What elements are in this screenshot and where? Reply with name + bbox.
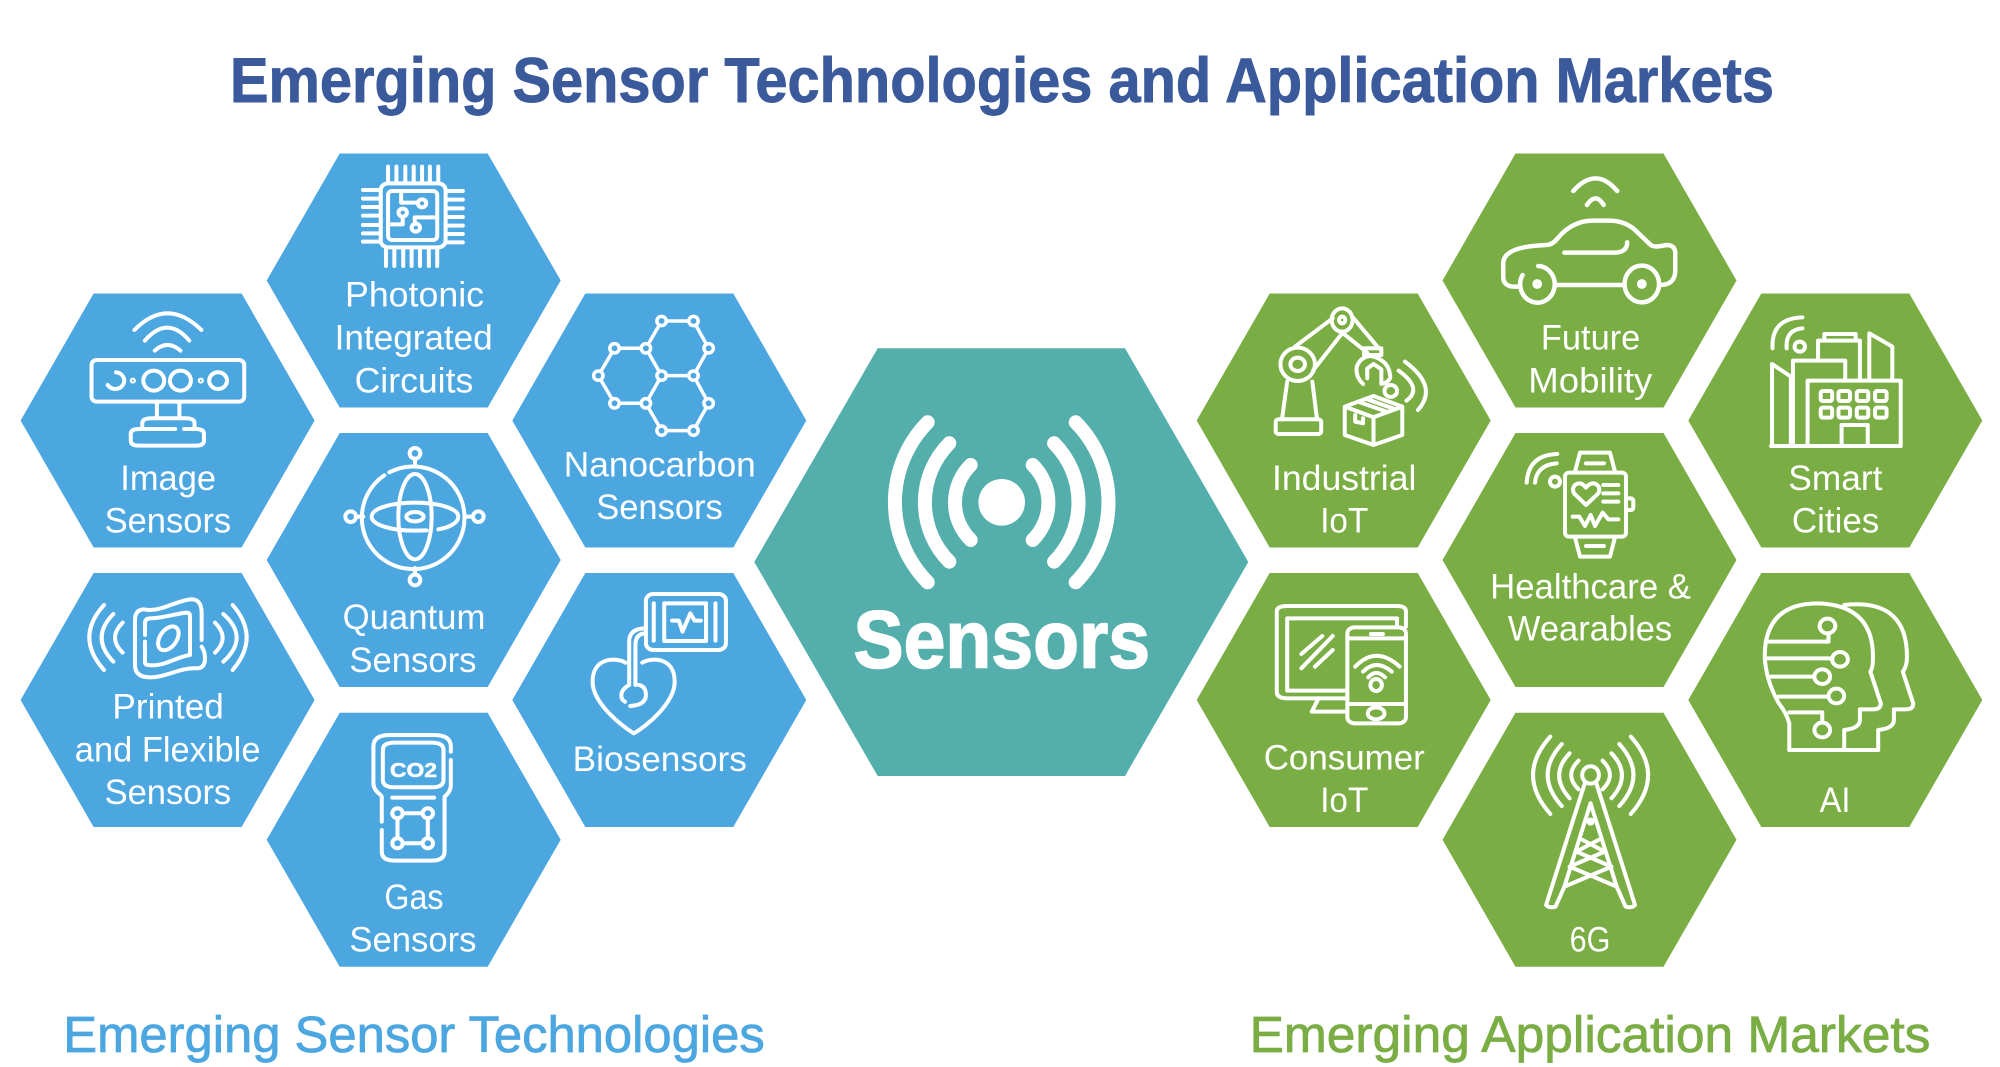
label: Healthcare & Wearables: Healthcare & bbox=[1490, 567, 1691, 606]
panel: industrial iot bbox=[1197, 294, 1491, 548]
hexagon: consumer iot bbox=[1197, 573, 1491, 827]
label: Smart Cities: Smart bbox=[1788, 459, 1883, 498]
panel: healthcare and wearables bbox=[1442, 433, 1736, 687]
panel: image sensors bbox=[21, 294, 315, 548]
title: Emerging Sensor Technologies and Application Markets bbox=[230, 46, 1774, 116]
label: Consumer IoT: IoT bbox=[1320, 781, 1368, 820]
label: Smart Cities bbox=[1788, 459, 1883, 540]
label: Photonic Integrated Circuits bbox=[335, 276, 493, 400]
label: Printed and Flexible Sensors: and Flexible bbox=[75, 730, 260, 769]
label: Quantum Sensors bbox=[343, 598, 485, 680]
panel: future mobility bbox=[1442, 154, 1736, 408]
hexagon: gas sensors bbox=[267, 713, 561, 967]
label: Industrial IoT: Industrial bbox=[1272, 459, 1416, 498]
icon: depth camera with wifi bbox=[92, 313, 244, 446]
hexagon: biosensors bbox=[512, 573, 806, 827]
label: Photonic Integrated Circuits: Circuits bbox=[355, 361, 473, 400]
hexagon: nanocarbon sensors bbox=[512, 294, 806, 548]
panel: central sensors hexagon bbox=[754, 348, 1248, 776]
label: Printed and Flexible Sensors bbox=[75, 687, 260, 812]
icon: connected car bbox=[1503, 178, 1675, 303]
hexagon: future mobility bbox=[1442, 154, 1736, 408]
hexagon: printed and flexible sensors bbox=[21, 573, 315, 827]
label: Future Mobility: Future bbox=[1541, 318, 1640, 357]
icon: smartwatch bbox=[1527, 453, 1633, 557]
label: Consumer IoT bbox=[1264, 738, 1425, 820]
label: Sensors: Sensors bbox=[854, 595, 1150, 686]
label: Future Mobility bbox=[1528, 318, 1653, 400]
icon: carbon lattice bbox=[594, 316, 713, 435]
icon: monitor and phone with wifi bbox=[1277, 606, 1406, 723]
icon: robot arm and box bbox=[1276, 308, 1426, 445]
label: Industrial IoT bbox=[1272, 459, 1416, 540]
label: Biosensors: Biosensors bbox=[573, 740, 747, 779]
panel: 6G bbox=[1442, 713, 1736, 967]
panel: printed and flexible sensors bbox=[21, 573, 315, 827]
label: Healthcare & Wearables: Wearables bbox=[1508, 610, 1672, 649]
label: Consumer IoT: Consumer bbox=[1264, 738, 1425, 777]
label: Smart Cities: Cities bbox=[1792, 501, 1879, 540]
hexagon: sensors hub bbox=[754, 348, 1248, 776]
hexagon: smart cities bbox=[1688, 294, 1982, 548]
label: Gas Sensors bbox=[349, 878, 476, 960]
label: Gas Sensors: Sensors bbox=[349, 921, 476, 960]
label: Image Sensors: Sensors bbox=[105, 501, 231, 540]
label: AI: AI bbox=[1820, 781, 1850, 820]
panel: smart cities bbox=[1688, 294, 1982, 548]
hexagon: quantum sensors bbox=[267, 433, 561, 687]
icon: CO2 gas meter: CO2 bbox=[390, 760, 437, 782]
icon: chip bbox=[363, 167, 463, 266]
label: 6G: 6G bbox=[1570, 921, 1610, 960]
hexagon: 6G bbox=[1442, 713, 1736, 967]
panel: biosensors bbox=[512, 573, 806, 827]
heading: emerging application markets: Emerging Application Markets bbox=[1250, 1006, 1930, 1063]
label: Nanocarbon Sensors: Sensors bbox=[596, 488, 723, 527]
label: Healthcare & Wearables bbox=[1490, 567, 1691, 649]
panel: photonic integrated circuits bbox=[267, 154, 561, 408]
panel: quantum sensors bbox=[267, 433, 561, 687]
label: Quantum Sensors: Quantum bbox=[343, 598, 485, 637]
icon: CO2 gas meter bbox=[373, 735, 451, 861]
hexagon: image sensors bbox=[21, 294, 315, 548]
icon: flexible sensor sheet bbox=[89, 599, 247, 677]
panel: consumer iot bbox=[1197, 573, 1491, 827]
hexagon: industrial iot bbox=[1197, 294, 1491, 548]
icon: broadcast signal bbox=[895, 422, 1108, 582]
label: Image Sensors bbox=[105, 459, 231, 540]
label: Printed and Flexible Sensors: Sensors bbox=[105, 773, 231, 812]
icon: quantum orbit sphere bbox=[345, 448, 484, 585]
hexagon: AI bbox=[1688, 573, 1982, 827]
panel: nanocarbon sensors bbox=[512, 294, 806, 548]
label: Industrial IoT: IoT bbox=[1320, 501, 1368, 540]
panel: gas sensors bbox=[267, 713, 561, 967]
label: Nanocarbon Sensors bbox=[564, 446, 756, 527]
label: Quantum Sensors: Sensors bbox=[349, 641, 476, 680]
label: Gas Sensors: Gas bbox=[384, 878, 444, 917]
label: Printed and Flexible Sensors: Printed bbox=[112, 687, 224, 726]
icon: cell tower bbox=[1533, 737, 1648, 907]
icon: AI heads with circuits bbox=[1765, 603, 1913, 750]
label: Future Mobility: Mobility bbox=[1528, 361, 1653, 400]
panel: AI bbox=[1688, 573, 1982, 827]
label: Image Sensors: Image bbox=[120, 459, 216, 498]
hexagon: photonic integrated circuits bbox=[267, 154, 561, 408]
label: Photonic Integrated Circuits: Photonic bbox=[345, 276, 484, 315]
icon: connected buildings bbox=[1771, 317, 1901, 446]
label: Nanocarbon Sensors: Nanocarbon bbox=[564, 446, 756, 485]
icon: heart with monitor bbox=[593, 594, 726, 733]
label: Photonic Integrated Circuits: Integrated bbox=[335, 318, 493, 357]
heading: emerging sensor technologies: Emerging Sensor Technologies bbox=[63, 1006, 765, 1063]
hexagon: healthcare and wearables bbox=[1442, 433, 1736, 687]
